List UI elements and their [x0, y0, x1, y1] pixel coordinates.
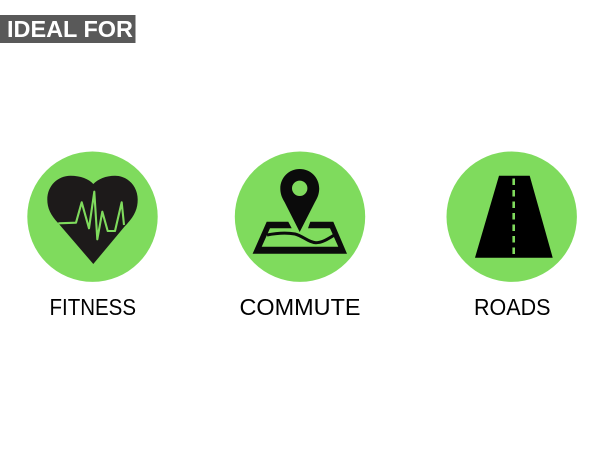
panel: roads [446, 152, 577, 320]
panel: commute [235, 152, 365, 320]
icon: heart with pulse [27, 152, 158, 282]
label: fitness: FITNESS [50, 294, 136, 320]
icon: road [446, 152, 577, 282]
panel: fitness [27, 152, 158, 320]
heading: IDEAL FOR: IDEAL FOR [7, 16, 133, 42]
icon: map with location pin [235, 152, 365, 282]
label: commute: COMMUTE [240, 294, 360, 320]
label: roads: ROADS [474, 294, 550, 320]
